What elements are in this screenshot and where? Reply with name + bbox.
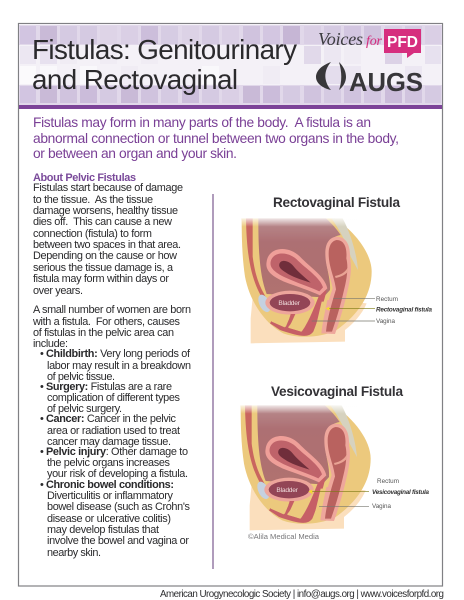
bullet list: causes: cancer may damage tissue. [47,436,171,448]
title [32,34,297,95]
text block: about fistulas: serious the tissue damage is, a [33,262,174,274]
bullet list: causes: disease or ulcerative colitis) [47,513,171,525]
column divider [212,194,214,569]
text block: about fistulas: over years. [33,285,83,297]
text block: about fistulas: connection (fistula) to form [33,228,152,240]
bullet list: causes: involve the bowel and vagina or [47,535,189,547]
bullet list: causes: of pelvic surgery. [47,403,122,415]
bullet list: causes: Cancer: Cancer in the pelvic [46,413,177,425]
text block: causes intro [32,304,191,350]
logo: AUGS: AUGS [349,69,423,97]
text block: causes intro: with a fistula. For others, causes [32,316,181,328]
leader lines [312,298,375,321]
bullet list: causes: labor may result in a breakdown [47,360,191,372]
image credit: ©Alila Medical Media [248,532,320,541]
bullet list: causes: bowel disease (such as Crohn's [47,501,191,513]
text block: about fistulas: fistula may form within days or [33,273,169,285]
text block: about fistulas: to the tissue. As the tissue [33,194,153,206]
bullet list: causes: Diverticulitis or inflammatory [47,490,174,502]
text block: about fistulas: dies off. This can cause a new [33,216,172,228]
label: Bladder: Bladder [278,300,301,307]
labels: vesicovaginal diagram: Vesicovaginal fistula [372,489,429,496]
text block: causes intro: include: [33,338,68,350]
labels: rectovaginal diagram: Vagina [376,318,395,325]
heading: Vesicovaginal Fistula: Vesicovaginal Fistula [271,384,403,399]
bullet list: causes: • [40,479,44,491]
diagram: rectovaginal fistula anatomy [242,217,375,343]
bullet list: causes: the pelvic organs increases [47,457,171,469]
labels: rectovaginal diagram: Rectovaginal fistula [376,306,432,314]
heading: Rectovaginal Fistula: Rectovaginal Fistula [273,195,400,210]
labels: vesicovaginal diagram [372,478,429,510]
logo: Voices for PFD: for [366,34,383,49]
labels: vesicovaginal diagram: Vagina [372,503,391,510]
bullet list: causes: of pelvic tissue. [47,371,115,383]
intro text [33,115,399,161]
text block: about fistulas: between two spaces in that area. [33,239,181,251]
bullet list: causes: complication of different types [47,392,181,404]
title: and Rectovaginal [32,64,238,95]
title: Fistulas: Genitourinary [32,34,297,65]
logo: Voices for PFD [318,29,421,58]
logo: AUGS [316,62,423,97]
bullet list: causes: Chronic bowel conditions: [46,479,174,491]
bullet list: causes: your risk of developing a fistula. [47,468,188,480]
footer contact line: American Urogynecologic Society | info@augs.org | www.voicesforpfd.org [160,589,444,600]
fistula marker arrow [326,307,329,311]
diagram: vesicovaginal fistula anatomy [241,404,371,530]
bullet list: causes: Surgery: Fistulas are a rare [46,381,172,393]
bullet list: causes: • [40,348,44,360]
labels: rectovaginal diagram: Rectum [376,296,398,303]
intro text: Fistulas may form in many parts of the body. A fistula is an [33,115,371,130]
text block: causes intro: A small number of women are born [33,304,191,316]
logo: Voices for PFD: Voices [318,29,363,49]
labels: rectovaginal diagram [376,296,432,325]
text block: about fistulas: damage worsens, healthy tissue [33,205,178,217]
bullet list: causes: may develop fistulas that [47,524,159,536]
bullet list: causes: area or radiation used to treat [47,425,180,437]
intro text: or between an organ and your skin. [33,146,237,161]
bullet list: causes: nearby skin. [47,547,101,559]
logo: Voices for PFD: PFD [387,34,418,51]
leader lines [311,492,369,506]
text block: about fistulas [33,182,183,297]
text block: causes intro: of fistulas in the pelvic area can [33,327,174,339]
header banner: lilac tile pattern [19,24,442,109]
label: Bladder: Bladder [276,487,299,494]
intro text: abnormal connection or tunnel between two organs in the body, [33,131,399,146]
bullet list: causes: • [40,446,44,458]
labels: vesicovaginal diagram: Rectum [377,478,399,485]
section heading: About Pelvic Fistulas: About Pelvic Fistulas [33,172,136,184]
bullet list: causes: Childbirth: Very long periods of [46,348,191,360]
text block: about fistulas: Depending on the cause or how [33,250,177,262]
bullet list: causes [40,348,191,559]
fistula marker arrow [308,489,312,494]
bullet list: causes: Pelvic injury: Other damage to [46,446,188,458]
bullet list: causes: • [40,381,44,393]
bullet list: causes: • [40,413,44,425]
text block: about fistulas: Fistulas start because of damage [33,182,183,194]
